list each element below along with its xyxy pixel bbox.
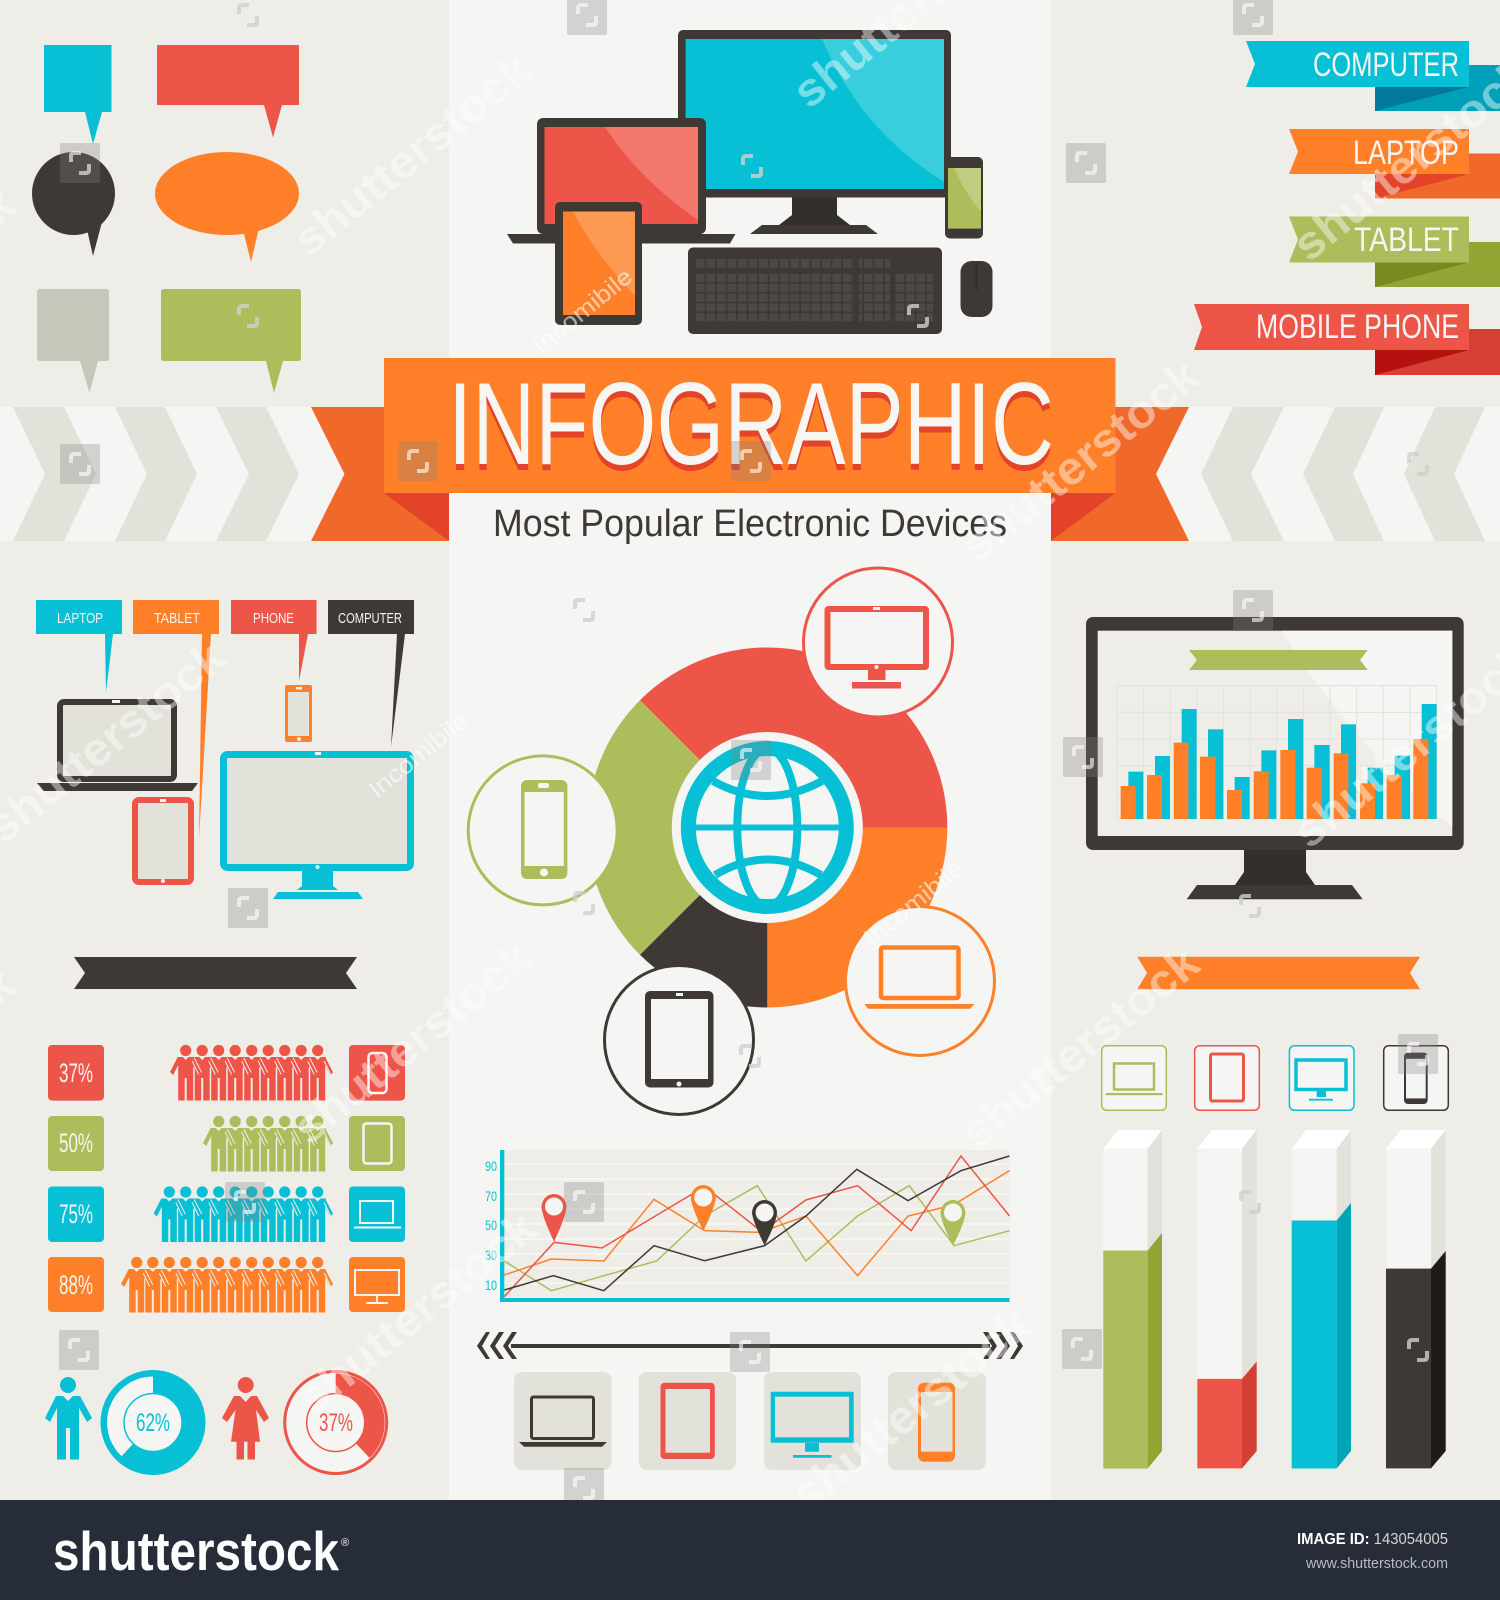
row 50 percent: [48, 1116, 405, 1172]
phone card: [1384, 1046, 1448, 1110]
laptop label: LAPTOP: [57, 610, 103, 627]
row 75 percent: [48, 1186, 405, 1242]
map pin: dark: [752, 1200, 777, 1246]
watermarks: shutterstock: [951, 349, 1209, 572]
laptop outline: [37, 700, 198, 791]
phone outline: [285, 685, 312, 742]
map pin: red: [542, 1194, 566, 1242]
axis labels: 30: [485, 1247, 497, 1263]
logo: shutterstock: [53, 1520, 339, 1582]
phone tile: [888, 1372, 986, 1470]
dark oval speech bubble: [32, 152, 115, 256]
watermarks: shutterstock: [782, 1298, 1040, 1521]
registered mark: ®: [341, 1537, 349, 1549]
monitor outline: [224, 752, 410, 899]
tablet card: [1195, 1046, 1259, 1110]
row 88 percent: 88%: [59, 1270, 93, 1300]
watermarks: shutterstock: [288, 1201, 546, 1424]
female donut: [285, 1372, 387, 1474]
line chart: [485, 1150, 1010, 1302]
monitor tile: [764, 1372, 861, 1470]
left chevron band: [13, 407, 299, 541]
people rows panel: [48, 1045, 405, 1312]
cyan speech bubble: [44, 45, 112, 144]
laptop tile: [514, 1372, 612, 1470]
desktop monitor: [678, 30, 951, 234]
row 37 percent: 37%: [59, 1058, 93, 1088]
mouse: [960, 261, 992, 317]
man icon: [45, 1377, 92, 1460]
tablet ribbon: [1289, 216, 1500, 287]
tablet tile: [639, 1372, 736, 1470]
green ribbon in screen: [1189, 650, 1368, 670]
laptop: [507, 118, 735, 244]
red segment: [640, 647, 947, 828]
monitor card: [1289, 1046, 1354, 1110]
green segment: [587, 700, 767, 955]
dark blank ribbon: [74, 957, 357, 989]
watermarks: shutterstock: [951, 936, 1209, 1159]
row 88 percent: [48, 1257, 405, 1312]
tablet label: [133, 600, 219, 839]
tablet outline: [135, 799, 191, 883]
green 3D bar: [1103, 1130, 1162, 1468]
title: INFOGRAPHIC: [448, 358, 1054, 489]
axis labels: 50: [485, 1217, 497, 1233]
image id: IMAGE ID: 143054005: [1297, 1531, 1448, 1548]
male donut: [100, 1370, 206, 1475]
laptop circle: [846, 906, 994, 1056]
double-headed timeline arrow: [477, 1332, 1023, 1359]
tablet label: TABLET: [154, 610, 200, 627]
row 37 percent: [48, 1045, 405, 1101]
device set illustration: [507, 30, 992, 334]
cyan 3D bar: [1292, 1130, 1351, 1468]
map pin: green: [940, 1200, 966, 1246]
speech bubbles panel: [32, 45, 301, 393]
footer bar: [0, 1500, 1500, 1600]
laptop ribbon: LAPTOP: [1353, 134, 1459, 172]
axis labels: 70: [485, 1188, 497, 1204]
axis labels: 90: [485, 1158, 497, 1174]
phone label: [231, 600, 316, 681]
title ribbon: [311, 358, 1189, 541]
laptop ribbon: [1289, 129, 1500, 198]
computer label: COMPUTER: [338, 610, 402, 627]
computer label: [328, 600, 414, 747]
orange segment: [767, 828, 947, 1008]
chart plot background: [504, 1150, 1010, 1300]
right chevron band: [1201, 407, 1485, 541]
green speech bubble: [161, 289, 301, 393]
dark segment: [640, 828, 767, 1008]
device icon cards: [1102, 1046, 1448, 1110]
phone: [945, 157, 983, 238]
axes: [500, 1150, 1010, 1302]
watermarks: shutterstock: [283, 43, 541, 266]
monitor body: [1086, 617, 1464, 899]
central donut chart: [468, 568, 994, 1114]
axis labels: 10: [485, 1277, 497, 1293]
globe icon: [672, 732, 863, 923]
mobile phone ribbon: [1194, 304, 1500, 375]
phone label: PHONE: [253, 610, 294, 627]
tablet ribbon: TABLET: [1354, 221, 1459, 259]
3D bars chart: [1103, 1130, 1446, 1468]
watermarks: shutterstock: [283, 931, 541, 1154]
grey speech bubble: [37, 289, 109, 393]
row 75 percent: 75%: [59, 1199, 93, 1229]
laptop label: [36, 600, 122, 692]
watermarks: Incomibile: [859, 855, 969, 952]
watermarks: Incomibile: [528, 263, 638, 360]
category ribbons: [1194, 41, 1500, 375]
red speech bubble: [157, 45, 299, 138]
laptop card: [1102, 1046, 1166, 1110]
device callouts panel: [36, 600, 414, 899]
monitor circle: [804, 568, 952, 717]
data lines: [504, 1156, 1010, 1297]
gender donut stats: [45, 1370, 387, 1475]
tablet circle: [604, 966, 754, 1114]
tablet: [555, 202, 642, 325]
orange oval speech bubble: [155, 152, 299, 262]
map pin: orange: [691, 1185, 716, 1231]
dark 3D bar: [1386, 1130, 1446, 1468]
title: INFOGRAPHIC: [448, 364, 1054, 495]
monitor with bar chart: [1086, 617, 1464, 899]
orange blank ribbon: [1137, 957, 1420, 989]
female donut: 37%: [319, 1409, 353, 1437]
watermarks: Incomibile: [364, 707, 474, 804]
axis labels: [485, 1158, 497, 1293]
woman icon: [222, 1377, 269, 1460]
computer ribbon: [1246, 41, 1500, 111]
subtitle: Most Popular Electronic Devices: [493, 503, 1007, 545]
phone circle: [468, 756, 617, 905]
keyboard: [688, 248, 942, 334]
device tiles row: [514, 1372, 986, 1470]
row 50 percent: 50%: [59, 1128, 93, 1158]
male donut: 62%: [136, 1409, 170, 1437]
website: www.shutterstock.com: [1305, 1555, 1448, 1572]
red 3D bar: [1197, 1130, 1257, 1468]
bar chart: [1117, 686, 1437, 819]
